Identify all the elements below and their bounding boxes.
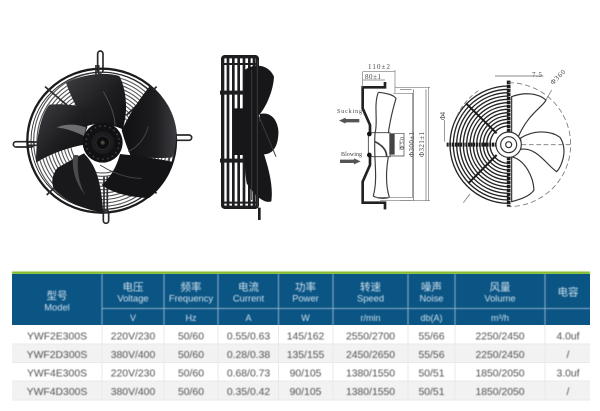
section mounting bolts (367, 132, 372, 157)
dimension labels: Blowing (341, 152, 362, 158)
column: volume: m³/h (491, 313, 509, 323)
column: current: Current (233, 292, 265, 304)
column: speed (357, 280, 384, 323)
table grid lines (102, 274, 590, 325)
column: frequency (169, 280, 213, 323)
column: speed: r/min (360, 313, 380, 323)
row: YWF2D300S: 55/56 (418, 350, 445, 361)
column: power: W (301, 313, 310, 323)
dimension labels: 110±2 (368, 63, 390, 71)
fan guard rings (34, 72, 171, 210)
row: YWF2E300S: 0.55/0.63 (227, 332, 270, 342)
column: speed: 转速 (360, 280, 381, 294)
table data rows (27, 332, 580, 398)
column: volume: 风量 (490, 282, 511, 294)
row: YWF4E300S: 1850/2050 (475, 368, 525, 380)
blade outlines (512, 94, 564, 202)
dimension labels: Sucking (337, 109, 362, 115)
section housing outline (363, 82, 385, 209)
row: YWF4E300S: 1380/1550 (346, 368, 395, 380)
column: model: 型号 (46, 289, 68, 302)
row: YWF2D300S: 2450/2650 (346, 350, 395, 361)
dimension labels: Φ50 (400, 137, 406, 150)
dimension labels: 7.5 (532, 71, 542, 79)
column: noise: Noise (420, 292, 443, 304)
row: YWF4D300S: / (567, 387, 570, 398)
side guard frame (220, 57, 260, 220)
column: current (233, 280, 265, 323)
row: YWF4E300S: 90/105 (290, 368, 322, 380)
dimension labels: Φ4 (439, 112, 447, 120)
sucking arrow (339, 118, 359, 124)
row: YWF2D300S (27, 350, 570, 361)
column: noise (420, 280, 443, 323)
row: YWF4E300S: 50/51 (418, 368, 445, 380)
fan mounting tabs (13, 51, 192, 223)
dimension labels (337, 63, 567, 158)
row: YWF2E300S: 2550/2700 (346, 332, 395, 342)
fan blades (36, 74, 176, 212)
table header labels (44, 280, 579, 323)
row: YWF4D300S: 50/51 (418, 387, 445, 398)
column: capacitance: 电容 (558, 286, 579, 298)
side blades and motor (233, 66, 278, 202)
hub rings (496, 132, 521, 157)
table green top rule (12, 272, 590, 274)
icon: side view of fan (220, 57, 278, 220)
row: YWF2D300S: / (567, 350, 570, 361)
column: current: 电流 (238, 280, 259, 294)
column: frequency: Hz (186, 313, 197, 323)
row: YWF4D300S (27, 387, 570, 398)
dimension leaders (400, 76, 552, 203)
row: YWF2D300S: 50/60 (178, 350, 204, 361)
row: YWF4E300S: YWF4E300S (27, 368, 87, 380)
row: YWF4E300S: 3.0uf (556, 368, 580, 380)
row: YWF4E300S: 0.68/0.73 (227, 368, 270, 380)
column: power: 功率 (295, 280, 316, 294)
row: YWF2E300S: 2250/2450 (475, 332, 525, 342)
row: YWF4D300S: 1380/1550 (346, 387, 395, 398)
column: volume: Volume (484, 292, 516, 304)
row: YWF2E300S (27, 332, 580, 342)
table alternate rows (12, 344, 590, 400)
dimension labels: Φ360 (549, 68, 567, 86)
row: YWF2E300S: 220V/230 (111, 332, 155, 342)
half guard concentric wires (450, 86, 509, 203)
column: noise: db(A) (420, 313, 443, 323)
column: model: Model (44, 302, 70, 312)
column: voltage: Voltage (117, 292, 149, 304)
fan motor hub (83, 123, 123, 163)
column: voltage (117, 280, 149, 323)
column: model (44, 289, 70, 312)
dimension labels: Φ300±1 (408, 132, 416, 157)
technical drawing: section view (339, 70, 430, 209)
dimension labels: 80±1 (365, 73, 382, 81)
row: YWF4E300S: 220V/230 (111, 368, 155, 380)
row: YWF4D300S: 1850/2050 (475, 387, 525, 398)
specification table (12, 272, 590, 400)
table header background (12, 274, 590, 325)
dimension lines (363, 70, 430, 201)
column: power (292, 280, 319, 323)
row: YWF2D300S: 2250/2450 (475, 350, 525, 361)
fan guard spokes (28, 65, 175, 213)
column: current: A (245, 313, 252, 323)
row: YWF2E300S: 145/162 (287, 332, 324, 342)
guard spokes (447, 81, 509, 207)
dashed outer circle (457, 83, 571, 207)
row: YWF4D300S: YWF4D300S (27, 387, 87, 398)
row: YWF2D300S: 135/155 (287, 350, 324, 361)
blowing arrow (340, 158, 361, 164)
column: voltage: V (130, 313, 136, 323)
row: YWF2D300S: 0.28/0.38 (227, 350, 270, 361)
column: frequency: Frequency (169, 292, 213, 304)
row: YWF2D300S: YWF2D300S (27, 350, 87, 361)
row: YWF4E300S (27, 368, 580, 380)
row: YWF4D300S: 380V/400 (111, 387, 155, 398)
technical drawing: guard and blade plan view (400, 76, 571, 207)
row: YWF4D300S: 90/105 (290, 387, 322, 398)
row: YWF2E300S: 55/66 (418, 332, 445, 342)
column: speed: Speed (357, 292, 384, 304)
column: volume (484, 282, 516, 323)
row: YWF4D300S: 50/60 (178, 387, 204, 398)
row: YWF4E300S: 50/60 (178, 368, 204, 380)
section motor (389, 134, 395, 155)
row: YWF2E300S: 4.0uf (556, 332, 580, 342)
row: YWF4D300S: 0.35/0.42 (227, 387, 270, 398)
fan outer rim (27, 69, 176, 213)
column: noise: 噪声 (421, 280, 442, 294)
column: frequency: 频率 (180, 280, 202, 294)
column: power: Power (292, 292, 319, 304)
row: YWF2E300S: YWF2E300S (27, 332, 87, 342)
row: YWF2E300S: 50/60 (178, 332, 204, 342)
icon: front view of axial fan (13, 51, 192, 223)
side guard bars over blade (252, 60, 276, 207)
dimension labels: Φ321±1 (418, 132, 426, 157)
section blades (368, 92, 404, 198)
column: voltage: 电压 (122, 280, 144, 294)
row: YWF2D300S: 380V/400 (111, 350, 155, 361)
